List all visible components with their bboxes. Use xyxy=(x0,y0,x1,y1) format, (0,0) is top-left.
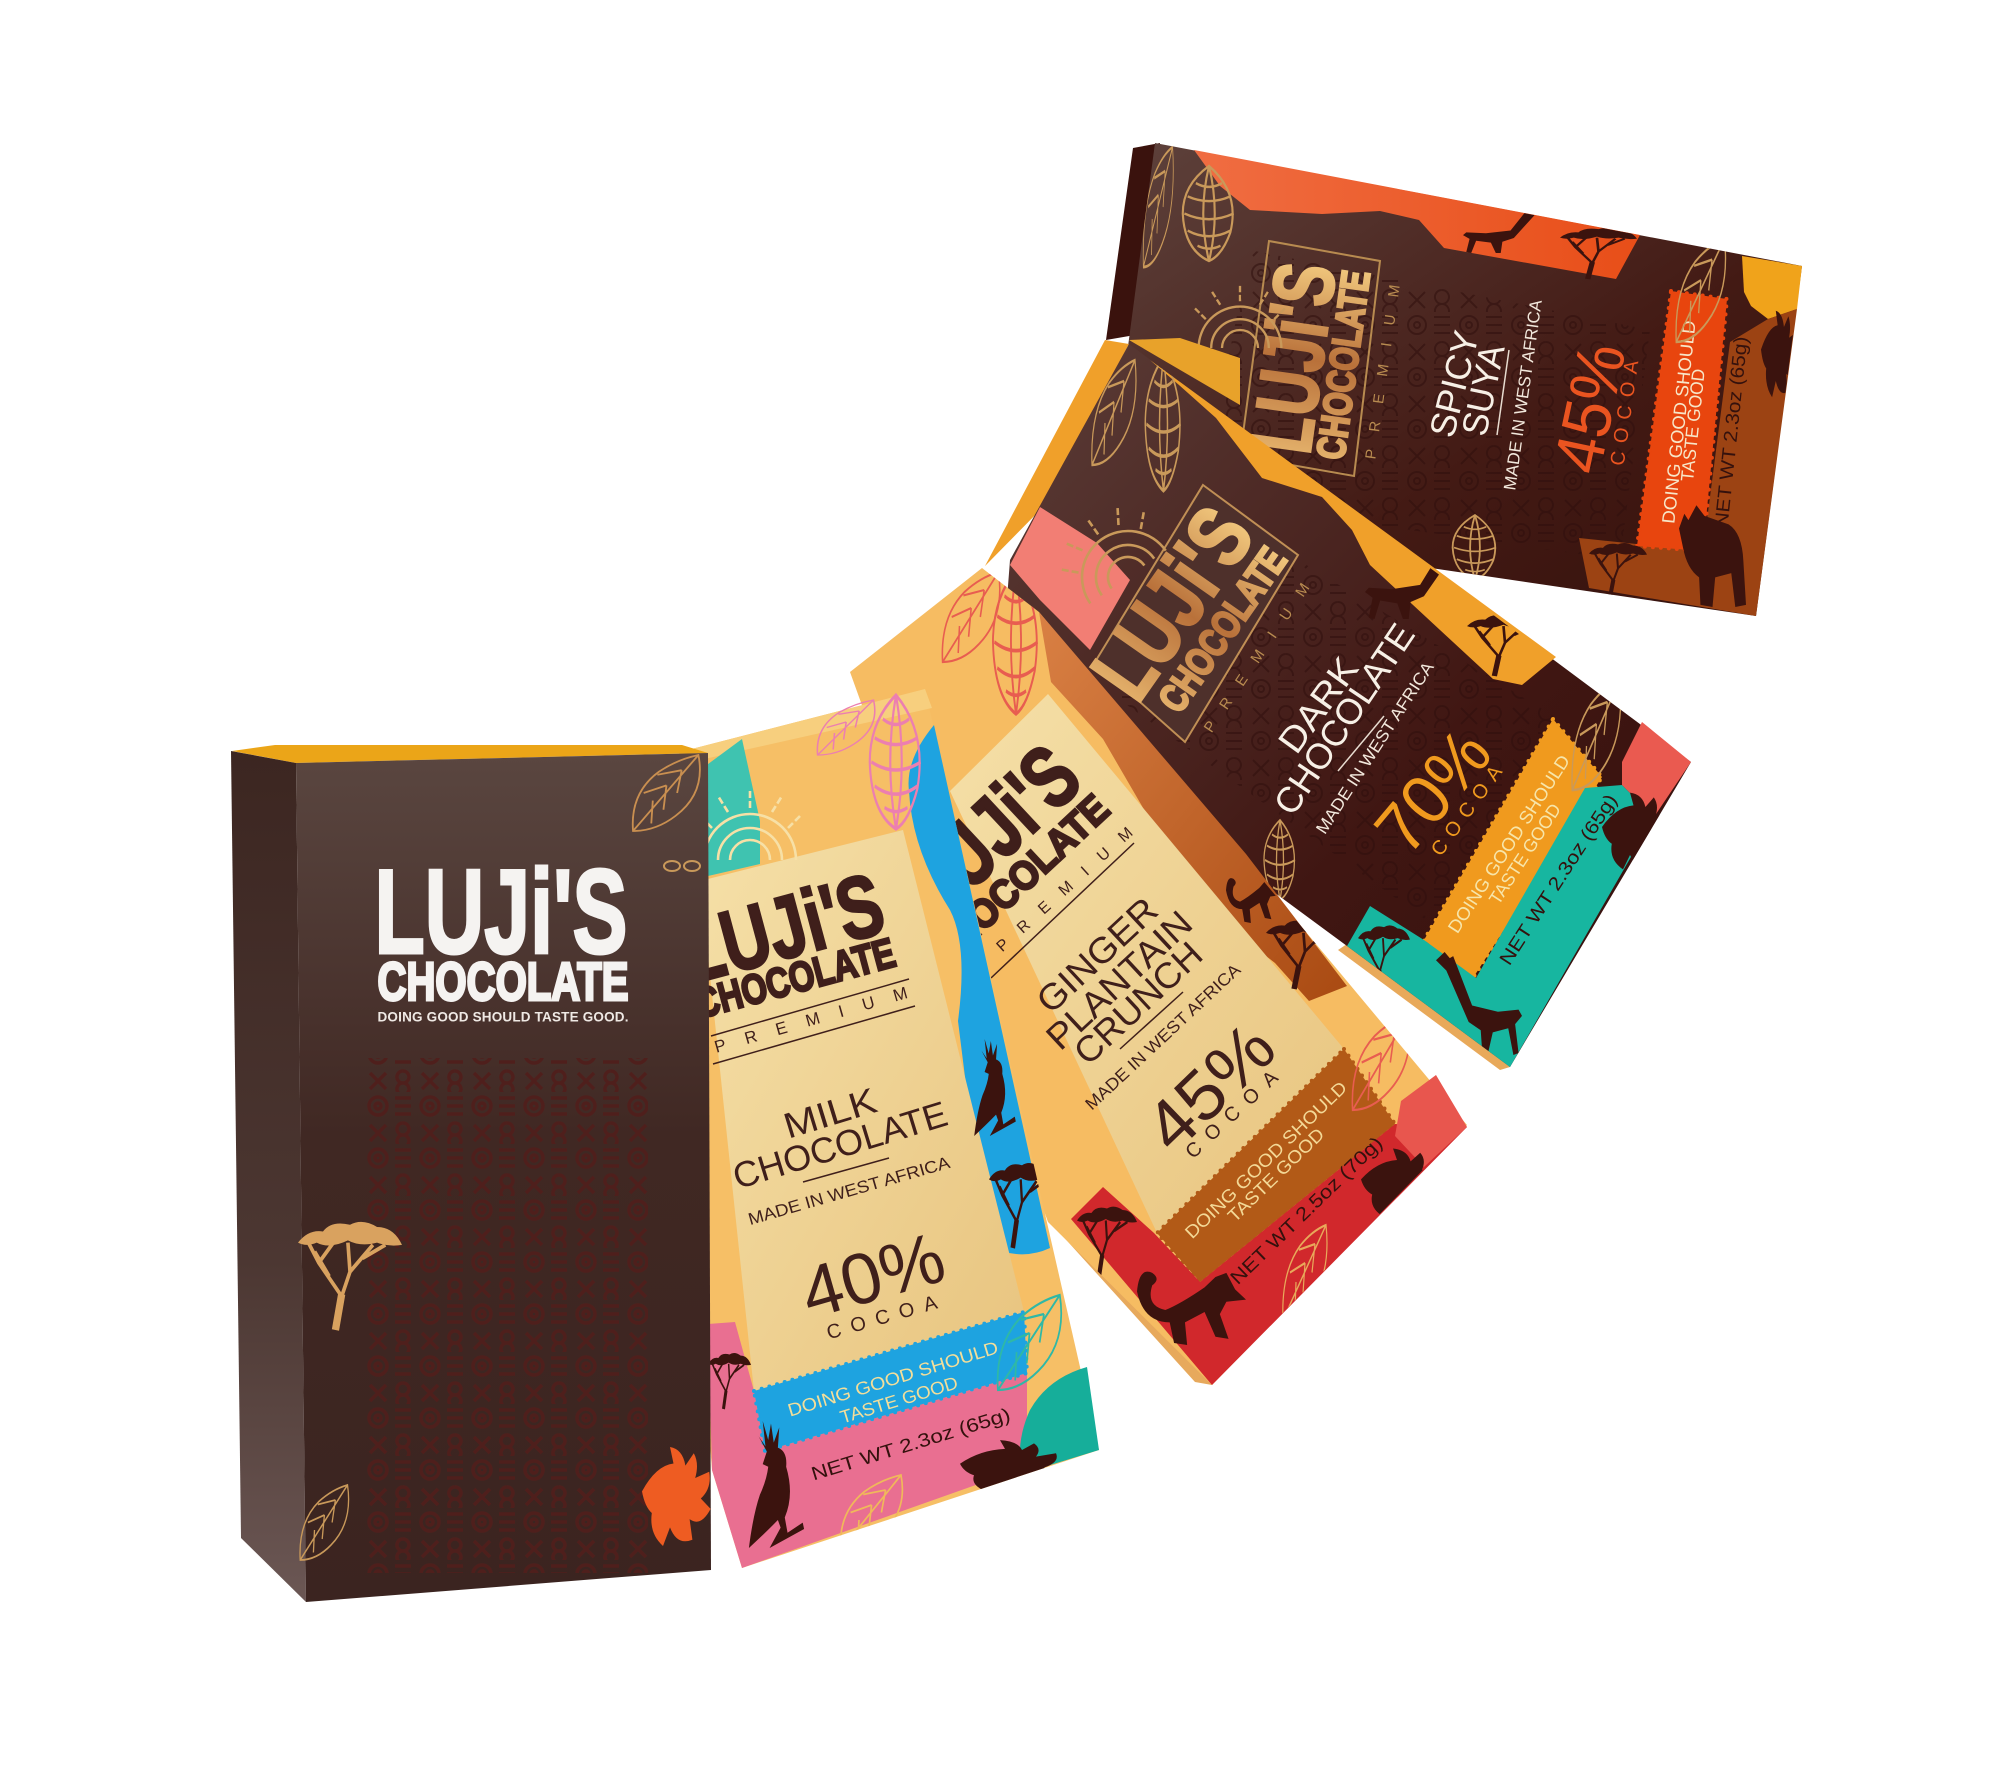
box top flap xyxy=(232,745,708,763)
dark flavour title: DARK xyxy=(1270,649,1366,761)
icon: gold acacia tree xyxy=(298,1222,402,1330)
milk ribbon text: TASTE GOOD xyxy=(838,1373,960,1427)
suya divider xyxy=(1497,350,1509,435)
dark orange top band xyxy=(1150,360,1556,685)
suya wrapper side spine xyxy=(1106,143,1160,340)
milk pink pods xyxy=(817,695,921,829)
ginger flavour title xyxy=(1028,889,1210,1073)
box logo xyxy=(374,845,628,1012)
bar: spicy suya xyxy=(1105,143,1802,616)
suya logo frame xyxy=(1240,241,1380,476)
suya percentage: 45% xyxy=(1539,337,1641,479)
box front face xyxy=(296,753,711,1602)
suya brown lower panel xyxy=(1579,309,1797,616)
milk top highlight xyxy=(680,689,932,760)
milk teal circle xyxy=(1020,1367,1099,1474)
milk sun outline xyxy=(700,790,800,860)
milk blue ribbon xyxy=(754,1312,1027,1451)
icon: gold leaf bottom xyxy=(300,1485,349,1560)
box logo: CHOCOLATE xyxy=(378,952,628,1012)
ginger red panel xyxy=(1071,1124,1467,1385)
icon: orange monstera leaf xyxy=(642,1447,711,1546)
box tagline: DOING GOOD SHOULD TASTE GOOD. xyxy=(378,1010,628,1024)
milk ribbon text: DOING GOOD SHOULD xyxy=(785,1337,1001,1421)
suya gold pods and leaves xyxy=(1143,147,1726,580)
suya orange ribbon xyxy=(1637,291,1727,551)
ginger label xyxy=(950,694,1344,1233)
dark weight: NET WT 2.3oz (65g) xyxy=(1496,791,1622,969)
suya ribbon text: TASTE GOOD xyxy=(1677,368,1709,482)
ginger flavour title: CRUNCH xyxy=(1066,933,1210,1073)
dark logo: LUJi'S xyxy=(1072,489,1272,717)
milk flavour title: CHOCOLATE xyxy=(728,1093,952,1197)
dark ribbon text: DOING GOOD SHOULD xyxy=(1444,751,1574,937)
dark logo frame xyxy=(1095,485,1298,742)
dark coral corner xyxy=(1622,722,1691,817)
milk logo xyxy=(670,854,900,1027)
suya logo xyxy=(1233,257,1379,462)
suya pattern xyxy=(1200,250,1650,560)
dark flavour title: CHOCOLATE xyxy=(1265,616,1423,822)
ginger percentage: 45% xyxy=(1130,1008,1290,1166)
dark orange ribbon xyxy=(1424,719,1602,978)
bar: ginger plantain crunch xyxy=(850,568,1467,1385)
dark logo: CHOCOLATE xyxy=(1150,540,1296,720)
ginger logo: CHOCOLATE xyxy=(920,786,1118,976)
suya origin text: MADE IN WEST AFRICA xyxy=(1500,298,1546,491)
icon: gold leaf top xyxy=(633,755,700,831)
suya logo: CHOCOLATE xyxy=(1309,268,1379,462)
ginger coral corner xyxy=(1395,1075,1467,1167)
dark pink corner xyxy=(1010,507,1130,650)
ginger divider xyxy=(1120,992,1183,1049)
milk pink panel xyxy=(708,1322,1027,1568)
ginger cocoa label: COCOA xyxy=(1181,1066,1283,1163)
bar: dark chocolate xyxy=(985,338,1691,1070)
ginger brown wave xyxy=(1039,612,1347,1001)
suya weight: NET WT 2.3oz (65g) xyxy=(1712,335,1752,529)
milk weight: NET WT 2.3oz (65g) xyxy=(809,1405,1013,1485)
suya logo: LUJi'S xyxy=(1233,257,1355,459)
suya yellow corner xyxy=(1742,256,1802,319)
milk cocoa label: COCOA xyxy=(824,1292,940,1344)
dark premium text: PREMIUM xyxy=(1201,580,1313,736)
suya premium text: PREMIUM xyxy=(1362,284,1404,460)
dark wrapper face xyxy=(1000,344,1691,1067)
milk divider xyxy=(803,1158,889,1182)
milk premium block: PREMIUM xyxy=(712,983,910,1057)
ginger logo: LUJi'S xyxy=(885,726,1099,934)
box adinkra pattern xyxy=(362,1058,648,1573)
dark percentage: 70% xyxy=(1360,714,1506,868)
suya wrapper face xyxy=(1105,143,1802,616)
icon: gold seeds xyxy=(664,861,700,871)
ginger weight: NET WT 2.5oz (70g) xyxy=(1227,1133,1387,1289)
dark origin text: MADE IN WEST AFRICA xyxy=(1312,658,1438,837)
ginger thickness edge xyxy=(1050,1219,1212,1385)
dark pattern xyxy=(1120,500,1560,930)
dark cocoa label: COCOA xyxy=(1427,761,1507,860)
milk gold pod outline xyxy=(840,1474,904,1536)
dark silhouettes xyxy=(1358,548,1671,1055)
milk percentage: 40% xyxy=(792,1218,954,1334)
ginger ribbon text: TASTE GOOD xyxy=(1224,1124,1328,1226)
ginger origin text: MADE IN WEST AFRICA xyxy=(1082,960,1245,1114)
suya flavour title: SUYA xyxy=(1453,341,1513,439)
dark wrapper thickness edge xyxy=(1338,944,1510,1070)
ginger flavour title: GINGER xyxy=(1028,889,1166,1021)
suya orange top band xyxy=(1194,150,1640,279)
suya cocoa label: COCOA xyxy=(1607,358,1643,467)
suya ribbon text: DOING GOOD SHOULD xyxy=(1658,320,1700,524)
dark wrapper orange spine xyxy=(985,340,1129,566)
dark ribbon text: TASTE GOOD xyxy=(1485,800,1565,908)
suya flavour title: SPICY xyxy=(1421,327,1487,441)
ginger brown ribbon xyxy=(1157,1049,1395,1282)
ginger wrapper face xyxy=(850,568,1467,1385)
ginger coral pods and leaves xyxy=(942,570,1410,1110)
dark divider xyxy=(1338,716,1384,771)
ginger flavour title: PLANTAIN xyxy=(1038,902,1200,1058)
milk blue wave xyxy=(909,725,1050,1254)
milk wrapper face xyxy=(660,689,1099,1568)
ginger logo xyxy=(885,726,1118,976)
ginger silhouettes xyxy=(1077,878,1439,1345)
ginger gold pod outline xyxy=(1283,1225,1327,1320)
dark back flap over suya xyxy=(1129,338,1240,405)
milk origin text: MADE IN WEST AFRICA xyxy=(746,1153,953,1229)
ginger ribbon text: DOING GOOD SHOULD xyxy=(1181,1077,1351,1243)
box left face xyxy=(231,751,306,1602)
milk flavour title: MILK xyxy=(779,1080,881,1146)
milk silhouettes xyxy=(708,1039,1058,1548)
ginger premium block: PREMIUM xyxy=(994,824,1136,956)
milk teal leaf xyxy=(998,1295,1061,1390)
bar: milk chocolate xyxy=(660,689,1099,1568)
milk logo: CHOCOLATE xyxy=(690,929,900,1027)
box logo: LUJi'S xyxy=(374,845,628,979)
milk teal corner xyxy=(700,739,760,876)
dark gold pods and leaves xyxy=(1047,357,1621,900)
milk logo: LUJi'S xyxy=(670,854,894,1002)
milk label xyxy=(700,830,1024,1391)
suya silhouettes xyxy=(1463,206,1797,607)
dark teal panel xyxy=(1347,785,1654,1067)
gift box xyxy=(231,745,711,1602)
